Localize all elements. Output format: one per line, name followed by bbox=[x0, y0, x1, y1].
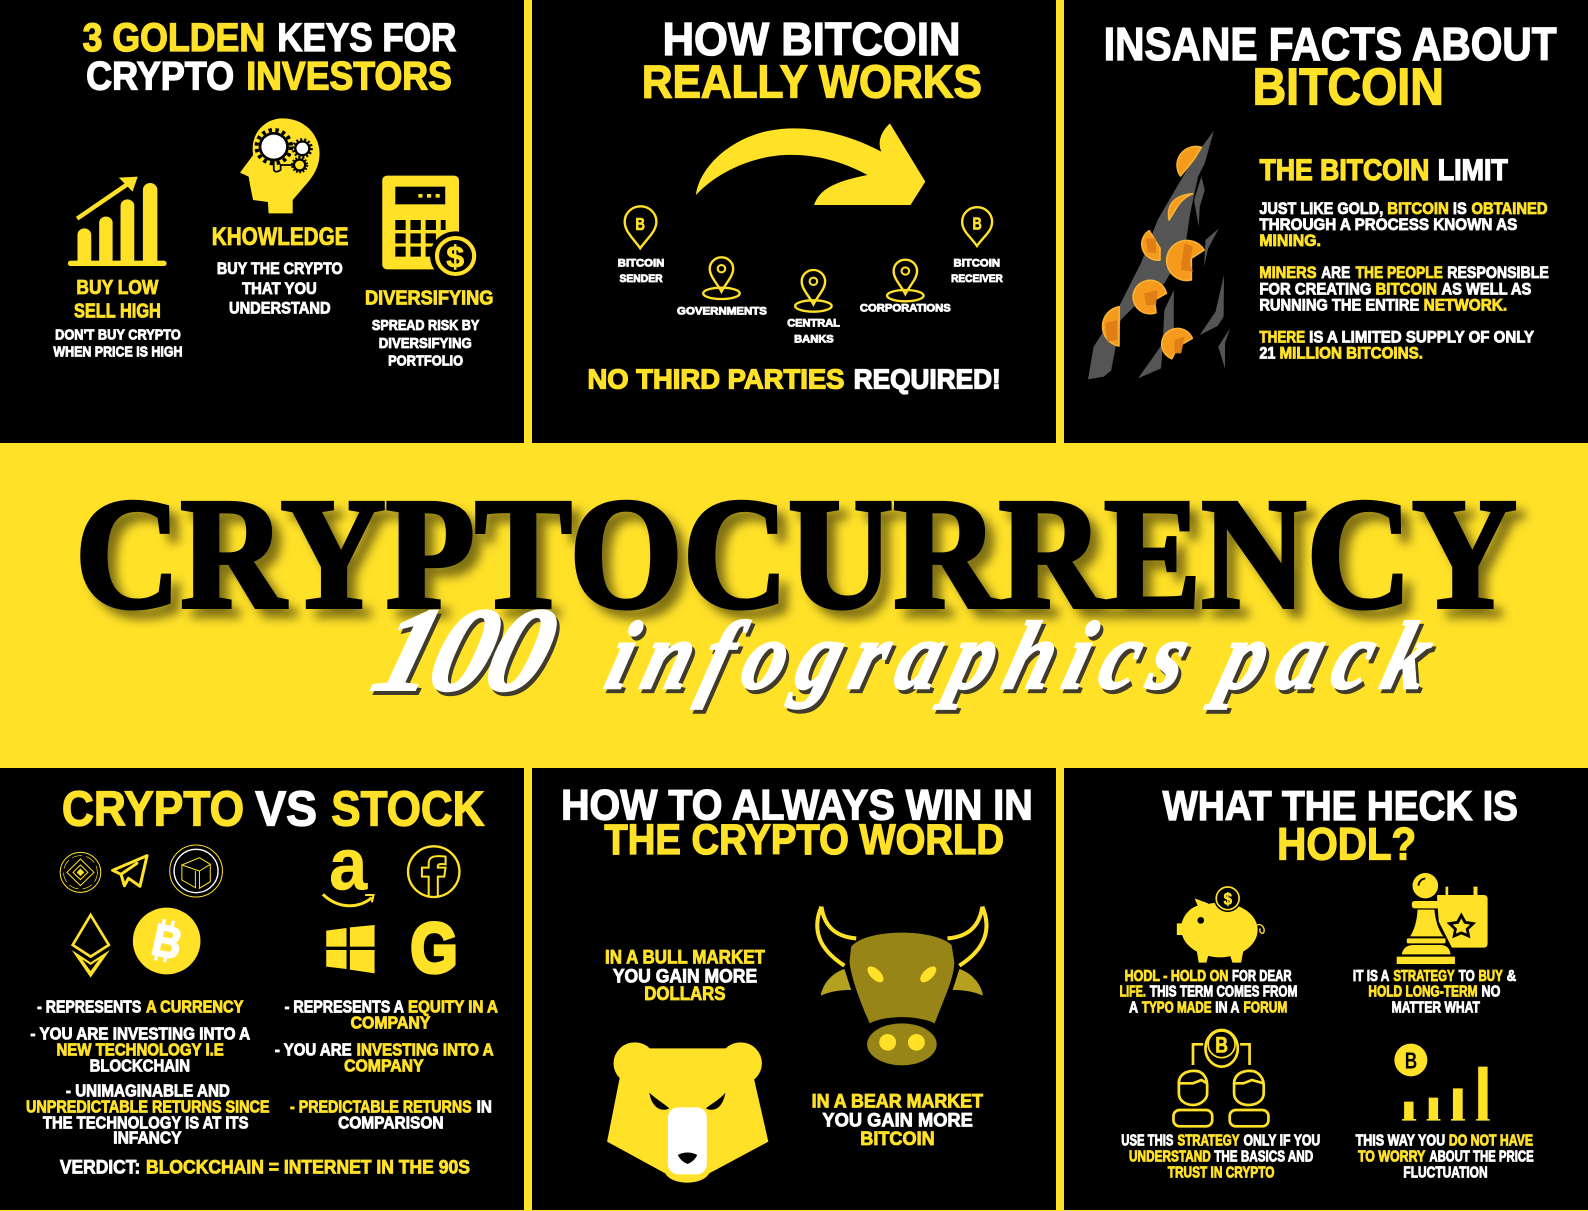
text: hodl definition bbox=[1120, 968, 1297, 1017]
label: buy low sell high: WHEN PRICE IS HIGH bbox=[53, 345, 183, 361]
icon: bitcoin coin bbox=[133, 908, 200, 974]
text: hodl definition: FORUM bbox=[1244, 1000, 1287, 1017]
icon: bitcoin receiver pin: B bbox=[972, 214, 982, 234]
icon: bitcoin coin and rising bars bbox=[1394, 1044, 1490, 1121]
text: gold and mining: IS bbox=[1453, 199, 1467, 218]
label: bitcoin sender: BITCOIN bbox=[618, 258, 664, 270]
text: hodl definition: TYPO MADE bbox=[1142, 1000, 1212, 1017]
heading: what the heck is hodl: HODL? bbox=[1277, 819, 1416, 869]
text: gold and mining: JUST LIKE GOLD, bbox=[1259, 199, 1383, 218]
list: crypto points: - UNIMAGINABLE AND bbox=[66, 1080, 230, 1100]
list: stock points: COMPARISON bbox=[338, 1112, 444, 1132]
label: bitcoin receiver bbox=[951, 258, 1003, 285]
text: hodl definition: LIFE. bbox=[1120, 984, 1146, 1001]
subtitle: 100 infographics pack: 100 bbox=[360, 584, 570, 716]
icon: ethereum bbox=[72, 915, 110, 978]
icon: bitcoin coin and rising bars: B bbox=[1405, 1047, 1417, 1073]
label: diversifying: DIVERSIFYING bbox=[379, 336, 472, 352]
text: gold and mining: OBTAINED bbox=[1471, 199, 1548, 218]
icon: bull head bbox=[817, 907, 987, 1065]
icon: bitcoin receiver pin bbox=[962, 207, 992, 246]
heading: how bitcoin really works bbox=[642, 14, 982, 107]
text: limited supply: MILLION BITCOINS. bbox=[1280, 343, 1423, 362]
heading: 3 golden keys for crypto investors: KEYS FOR bbox=[277, 15, 456, 60]
text: bull market: IN A BULL MARKET bbox=[605, 947, 765, 969]
text: bear market: IN A BEAR MARKET bbox=[812, 1090, 983, 1112]
text: limited supply: IS A LIMITED SUPPLY OF ONLY bbox=[1309, 327, 1534, 346]
icon: neo coin bbox=[170, 845, 222, 897]
list: crypto points: UNPREDICTABLE RETURNS SINCE bbox=[26, 1096, 269, 1116]
text: strategy: STRATEGY bbox=[1393, 968, 1455, 985]
text: bull market: DOLLARS bbox=[644, 983, 725, 1005]
text: hodl definition: IN A bbox=[1215, 1000, 1239, 1017]
icon: windows logo bbox=[326, 925, 375, 973]
icon: bitcoin sender pin: B bbox=[635, 213, 645, 234]
text: miners: ARE bbox=[1321, 263, 1350, 282]
verdict line: BLOCKCHAIN = INTERNET IN THE 90S bbox=[146, 1157, 470, 1179]
text: miners: NETWORK. bbox=[1424, 296, 1507, 315]
icon: head with gears bbox=[240, 118, 320, 213]
heading: how bitcoin really works: HOW BITCOIN bbox=[663, 14, 960, 65]
text: strategy: BUY bbox=[1479, 968, 1503, 985]
heading: crypto vs stock bbox=[62, 781, 485, 837]
heading: 3 golden keys for crypto investors: 3 GOLDEN bbox=[83, 15, 265, 60]
text: miners: RESPONSIBLE bbox=[1447, 263, 1549, 282]
text: strategy: IT IS A bbox=[1353, 968, 1389, 985]
list: stock points: COMPANY bbox=[344, 1056, 424, 1076]
subtitle: 100 infographics pack: infographics bbox=[596, 602, 1202, 710]
icon: bear head bbox=[607, 1042, 768, 1183]
panel: what is hodl bbox=[1064, 768, 1588, 1210]
text: gold and mining: MINING. bbox=[1259, 231, 1321, 250]
label: corporations: CORPORATIONS bbox=[860, 303, 951, 315]
text: strategy bbox=[1353, 968, 1516, 1017]
label: buy low sell high bbox=[53, 277, 183, 361]
label: knowledge: THAT YOU bbox=[242, 279, 317, 298]
text: limited supply bbox=[1259, 327, 1534, 362]
verdict line: VERDICT: bbox=[60, 1157, 140, 1179]
text: do not worry: THIS WAY YOU bbox=[1356, 1133, 1445, 1150]
icon: chess pawn and calendar bbox=[1393, 873, 1488, 965]
icon: bitcoin sender pin bbox=[625, 206, 656, 248]
label: buy low sell high: BUY LOW bbox=[76, 277, 159, 299]
text: use this strategy: THE BASICS AND bbox=[1214, 1149, 1313, 1166]
list: crypto points: - REPRESENTS bbox=[37, 996, 141, 1016]
list: stock points: - PREDICTABLE RETURNS bbox=[290, 1096, 472, 1116]
text: use this strategy: ONLY IF YOU bbox=[1244, 1133, 1320, 1150]
panel: how bitcoin works bbox=[532, 0, 1056, 443]
list: crypto points: NEW TECHNOLOGY I.E bbox=[56, 1040, 224, 1060]
subtitle: 100 infographics pack: pack bbox=[1203, 602, 1445, 710]
text: do not worry: ABOUT THE PRICE bbox=[1429, 1149, 1534, 1166]
text: do not worry bbox=[1356, 1133, 1534, 1182]
text: limited supply: THERE bbox=[1259, 327, 1305, 346]
heading: insane facts about bitcoin: BITCOIN bbox=[1253, 59, 1444, 116]
label: knowledge bbox=[212, 223, 348, 317]
icon: corporations pin bbox=[887, 260, 924, 301]
label: bitcoin receiver: BITCOIN bbox=[954, 258, 1000, 270]
heading: 3 golden keys for crypto investors bbox=[83, 15, 456, 98]
text: gold and mining: BITCOIN bbox=[1387, 199, 1449, 218]
text: use this strategy: STRATEGY bbox=[1178, 1133, 1240, 1150]
arrow: sender to receiver bbox=[696, 123, 925, 205]
text: bull market bbox=[605, 947, 765, 1005]
icon: bitcoin coin: B bbox=[148, 914, 187, 969]
text: bear market bbox=[812, 1090, 983, 1150]
list: crypto points: THE TECHNOLOGY IS AT ITS bbox=[43, 1112, 248, 1132]
icon: people sharing bitcoin: B bbox=[1215, 1032, 1228, 1057]
text: strategy: HOLD LONG-TERM bbox=[1368, 984, 1478, 1001]
panel: 3 golden keys bbox=[0, 0, 524, 443]
heading: crypto vs stock: STOCK bbox=[331, 781, 485, 837]
label: knowledge: UNDERSTAND bbox=[229, 299, 331, 317]
panel: crypto vs stock bbox=[0, 768, 524, 1210]
list: crypto points: A CURRENCY bbox=[146, 996, 244, 1016]
text: do not worry: DO NOT HAVE bbox=[1449, 1133, 1533, 1150]
callout: no third parties required bbox=[588, 364, 1001, 396]
list: crypto points: - YOU ARE INVESTING INTO A bbox=[30, 1024, 251, 1044]
text: limited supply: 21 bbox=[1259, 343, 1275, 362]
text: strategy: & bbox=[1507, 968, 1516, 985]
icon: calculator with dollar coin: $ bbox=[446, 239, 464, 274]
icon: growth bars with arrow bbox=[68, 177, 167, 266]
heading: what the heck is hodl bbox=[1163, 782, 1518, 869]
text: miners: AS WELL AS bbox=[1441, 280, 1531, 299]
label: central banks: BANKS bbox=[794, 334, 834, 346]
label: bitcoin receiver: RECEIVER bbox=[951, 273, 1003, 285]
list: stock points: - REPRESENTS A bbox=[285, 996, 404, 1016]
subtitle: 100 infographics pack bbox=[360, 584, 1445, 716]
heading: 3 golden keys for crypto investors: INVESTORS bbox=[246, 53, 452, 98]
label: governments: GOVERNMENTS bbox=[677, 306, 767, 318]
icon: facebook logo bbox=[408, 846, 459, 898]
label: buy low sell high: SELL HIGH bbox=[74, 301, 161, 322]
label: central banks bbox=[787, 318, 840, 346]
icon: binance coin bbox=[60, 852, 101, 892]
text: use this strategy: TRUST IN CRYPTO bbox=[1168, 1165, 1274, 1182]
list: stock points: IN bbox=[477, 1096, 492, 1116]
text: miners: FOR CREATING bbox=[1259, 280, 1371, 299]
icon: central banks pin bbox=[795, 270, 832, 312]
label: diversifying: SPREAD RISK BY bbox=[372, 318, 479, 334]
icon: amazon logo: a bbox=[329, 823, 368, 905]
text: use this strategy bbox=[1121, 1133, 1320, 1182]
callout: no third parties required: REQUIRED! bbox=[854, 364, 1001, 396]
list: stock points bbox=[275, 996, 498, 1132]
text: hodl definition: HODL - HOLD ON bbox=[1125, 968, 1228, 985]
heading: 3 golden keys for crypto investors: CRYPTO bbox=[86, 53, 234, 98]
heading: how bitcoin really works: REALLY WORKS bbox=[642, 56, 982, 107]
heading: what the heck is hodl: WHAT THE HECK IS bbox=[1163, 782, 1518, 829]
label: central banks: CENTRAL bbox=[787, 318, 840, 330]
heading: how to always win in the crypto world: HOW TO ALWAYS WIN IN bbox=[561, 782, 1033, 829]
heading: crypto vs stock: CRYPTO bbox=[62, 781, 244, 837]
text: hodl definition: FOR DEAR bbox=[1232, 968, 1292, 985]
subheading: the bitcoin limit: LIMIT bbox=[1438, 154, 1508, 187]
icon: cracked rock with bitcoins bbox=[1088, 131, 1230, 379]
text: hodl definition: THIS TERM COMES FROM bbox=[1150, 984, 1297, 1001]
heading: how to always win in the crypto world bbox=[561, 782, 1033, 864]
list: crypto points: INFANCY bbox=[113, 1128, 182, 1148]
text: miners bbox=[1259, 263, 1549, 315]
text: use this strategy: USE THIS bbox=[1121, 1133, 1173, 1150]
heading: how to always win in the crypto world: THE CRYPTO WORLD bbox=[604, 816, 1004, 864]
text: miners: THE PEOPLE bbox=[1356, 263, 1443, 282]
label: bitcoin sender bbox=[618, 258, 664, 285]
text: miners: RUNNING THE ENTIRE bbox=[1259, 296, 1419, 315]
text: do not worry: FLUCTUATION bbox=[1403, 1165, 1488, 1182]
label: knowledge: KHOWLEDGE bbox=[212, 223, 348, 251]
panel: title band bbox=[0, 443, 1588, 768]
icon: piggy bank with coin: $ bbox=[1224, 889, 1233, 908]
list: stock points: COMPANY bbox=[351, 1012, 431, 1032]
text: hodl definition: A bbox=[1129, 1000, 1138, 1017]
panel: insane facts bbox=[1064, 0, 1588, 443]
label: buy low sell high: DON'T BUY CRYPTO bbox=[55, 328, 181, 343]
text: do not worry: TO WORRY bbox=[1358, 1149, 1426, 1166]
label: knowledge: BUY THE CRYPTO bbox=[217, 259, 343, 278]
icon: telegram plane bbox=[113, 856, 147, 886]
list: stock points: EQUITY IN A bbox=[408, 996, 498, 1016]
text: miners: BITCOIN bbox=[1375, 280, 1437, 299]
list: crypto points bbox=[26, 996, 269, 1148]
text: strategy: TO bbox=[1459, 968, 1475, 985]
heading: crypto vs stock: VS bbox=[255, 781, 317, 837]
list: stock points: - YOU ARE bbox=[275, 1040, 352, 1060]
text: strategy: MATTER WHAT bbox=[1392, 1000, 1480, 1017]
text: gold and mining bbox=[1259, 199, 1548, 250]
text: bull market: YOU GAIN MORE bbox=[613, 965, 757, 987]
callout: no third parties required: NO THIRD PARTIES bbox=[588, 364, 844, 396]
text: miners: MINERS bbox=[1259, 263, 1317, 282]
text: use this strategy: UNDERSTAND bbox=[1129, 1149, 1211, 1166]
panel: always win bbox=[532, 768, 1056, 1210]
list: stock points: INVESTING INTO A bbox=[357, 1040, 494, 1060]
list: crypto points: BLOCKCHAIN bbox=[90, 1056, 190, 1076]
text: bear market: BITCOIN bbox=[860, 1128, 935, 1150]
label: diversifying: DIVERSIFYING bbox=[365, 288, 493, 310]
heading: insane facts about bitcoin bbox=[1104, 18, 1557, 116]
text: gold and mining: THROUGH A PROCESS KNOWN AS bbox=[1259, 215, 1517, 234]
label: diversifying bbox=[365, 288, 493, 369]
icon: calculator with dollar coin bbox=[382, 176, 481, 281]
text: strategy: NO bbox=[1482, 984, 1500, 1001]
icon: piggy bank with coin bbox=[1177, 885, 1264, 963]
icon: people sharing bitcoin bbox=[1173, 1030, 1268, 1126]
subheading: the bitcoin limit: THE BITCOIN bbox=[1260, 154, 1429, 187]
icon: governments pin bbox=[703, 257, 740, 299]
icon: google logo: G bbox=[411, 909, 457, 987]
label: bitcoin sender: SENDER bbox=[620, 273, 663, 285]
label: diversifying: PORTFOLIO bbox=[388, 354, 463, 369]
text: bear market: YOU GAIN MORE bbox=[822, 1110, 973, 1132]
